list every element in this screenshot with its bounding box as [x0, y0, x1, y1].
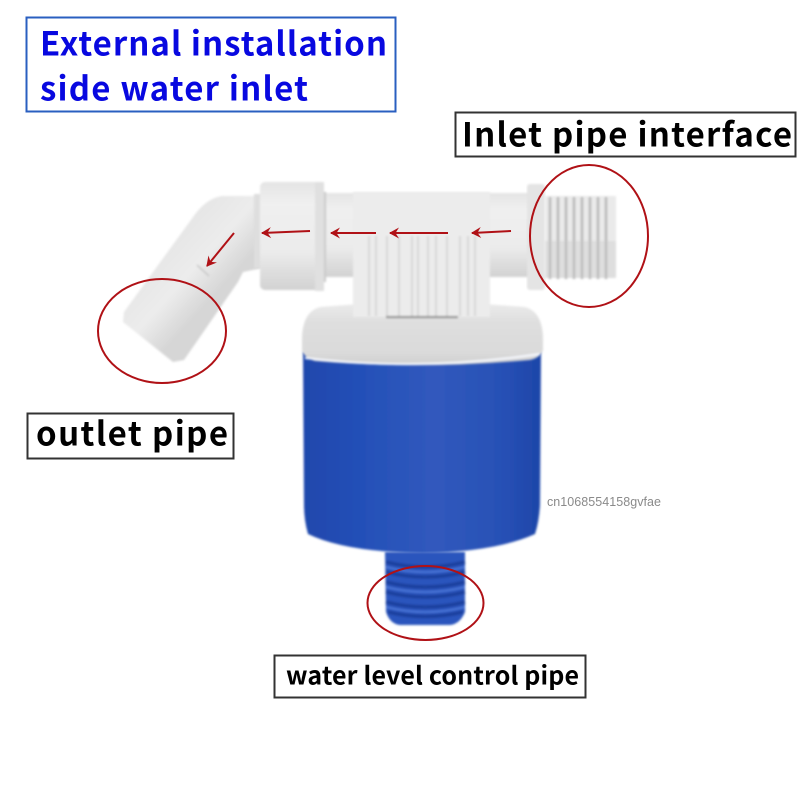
circle: inlet thread	[530, 165, 648, 307]
arrow: elbow	[207, 233, 234, 266]
inlet thread	[545, 196, 616, 279]
elbow outlet pipe	[123, 196, 262, 362]
arrow: pipe right	[472, 231, 511, 233]
watermark: cn1068554158gvfae	[547, 495, 661, 509]
title line 1: External installation	[40, 18, 387, 66]
arrow: pipe left	[331, 232, 376, 234]
arrow: block	[390, 232, 448, 234]
label: water level control pipe: water level control pipe	[286, 656, 579, 692]
label: inlet pipe interface: Inlet pipe interface	[462, 108, 792, 156]
main horizontal pipe	[315, 193, 533, 277]
blue float body	[303, 352, 541, 553]
title box	[26, 18, 396, 112]
ribbed centre block	[353, 192, 490, 318]
left union nut	[254, 182, 326, 291]
arrow: union nut	[262, 231, 310, 233]
blue threaded pipe	[385, 552, 465, 625]
inlet flange	[527, 184, 545, 290]
red flow arrows	[207, 231, 511, 266]
title line 2: side water inlet	[40, 62, 308, 110]
valve product photo	[123, 182, 616, 625]
grey float cap	[302, 302, 543, 365]
circle: outlet pipe	[98, 279, 226, 383]
label: outlet pipe: outlet pipe	[36, 408, 228, 456]
circle: water level control pipe	[368, 566, 484, 640]
